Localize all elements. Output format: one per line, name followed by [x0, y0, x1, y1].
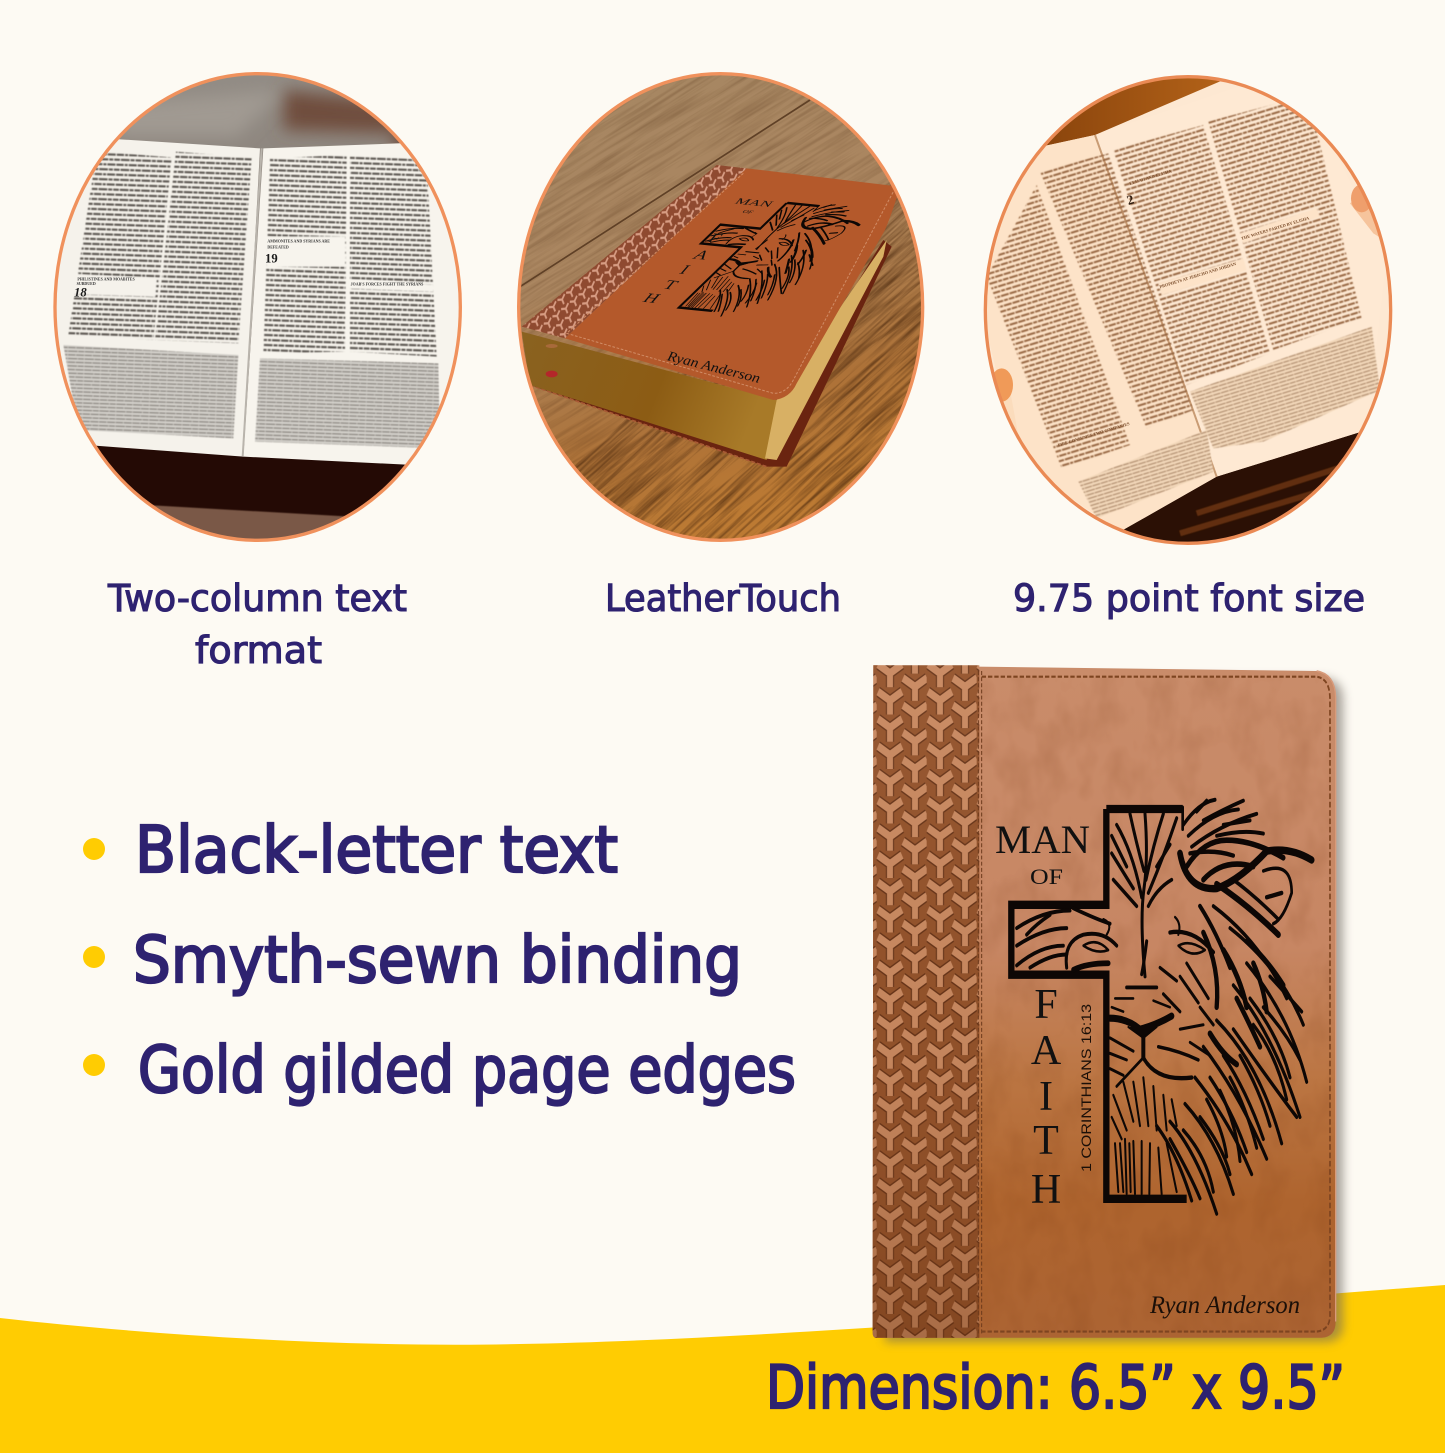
caption: LeatherTouch: LeatherTouch [605, 577, 841, 620]
panel: open bible two-column photo: DEFEATED [267, 245, 289, 250]
yellow wave band [0, 1285, 1445, 1453]
panel: leather bible on wood table photo: MAN [732, 196, 776, 209]
book cover front view [873, 665, 1343, 1342]
panel: leather bible on wood table photo: OF [740, 209, 755, 215]
bullet: gold gilded page edges: Gold gilded page edges [138, 1034, 796, 1108]
panel: leather bible on wood table photo: H [639, 291, 664, 306]
bullet: black-letter text: Black-letter text [135, 814, 618, 888]
panel: hands holding open bible photo: ELIJAH AND ELISHA [1129, 168, 1173, 186]
lion and cross artwork [1011, 800, 1312, 1214]
panel: hands holding open bible photo [980, 70, 1400, 550]
panel: leather bible on wood table photo [517, 72, 924, 542]
panel: hands holding open bible photo: FIRE CONSUMES TWO COMPANIES [1057, 421, 1131, 448]
panel: leather bible on wood table photo: T [659, 277, 682, 292]
panel: hands holding open bible photo: THE WATERS PARTED BY ELISHA [1240, 215, 1311, 241]
feature list [83, 814, 796, 1108]
dimension label: Dimension: 6.5” x 9.5” [766, 1353, 1345, 1423]
panel: open bible two-column photo: 18 [74, 286, 87, 300]
title: MAN OF FAITH: MAN [995, 817, 1090, 862]
caption: font size: 9.75 point font size [1013, 577, 1365, 620]
title: MAN OF FAITH: OF [1030, 864, 1063, 889]
panel: open bible two-column photo: AMMONITES AND SYRIANS ARE [267, 238, 330, 243]
verse reference: 1 CORINTHIANS 16:13 [1078, 1004, 1094, 1172]
bullet: smyth-sewn binding: Smyth-sewn binding [133, 924, 742, 998]
caption: two-column text format: Two-column text [107, 577, 407, 620]
title: MAN OF FAITH [995, 817, 1090, 1213]
panel: leather bible on wood table photo: Ryan Anderson [665, 349, 762, 387]
panel: leather bible on wood table photo: A [689, 247, 714, 263]
panel: hands holding open bible photo: PROPHETS AT JERICHO AND JORDAN [1159, 261, 1238, 289]
title: MAN OF FAITH: H [1031, 1167, 1061, 1213]
panel: open bible two-column photo [50, 70, 470, 550]
title: MAN OF FAITH: A [1031, 1028, 1062, 1074]
panel: leather bible on wood table photo: I [676, 262, 694, 277]
panel: open bible two-column photo: SUBDUED [77, 281, 96, 286]
caption: two-column text format: format [195, 629, 322, 672]
panel: leather bible on wood table photo: F [704, 231, 726, 246]
panel: hands holding open bible photo: 2 [1125, 191, 1136, 208]
personalised name: Ryan Anderson [1149, 1292, 1300, 1319]
panel: open bible two-column photo: 19 [265, 252, 278, 266]
caption: two-column text format [107, 577, 407, 672]
spine embossed pattern [873, 665, 979, 1338]
title: MAN OF FAITH: I [1039, 1074, 1053, 1120]
panel: open bible two-column photo: JOAB'S FORCES FIGHT THE SYRIANS [351, 281, 424, 286]
panel: open bible two-column photo: PHILISTINES AND MOABITES [77, 277, 135, 282]
title: MAN OF FAITH: T [1033, 1118, 1059, 1164]
title: MAN OF FAITH: F [1034, 982, 1058, 1028]
